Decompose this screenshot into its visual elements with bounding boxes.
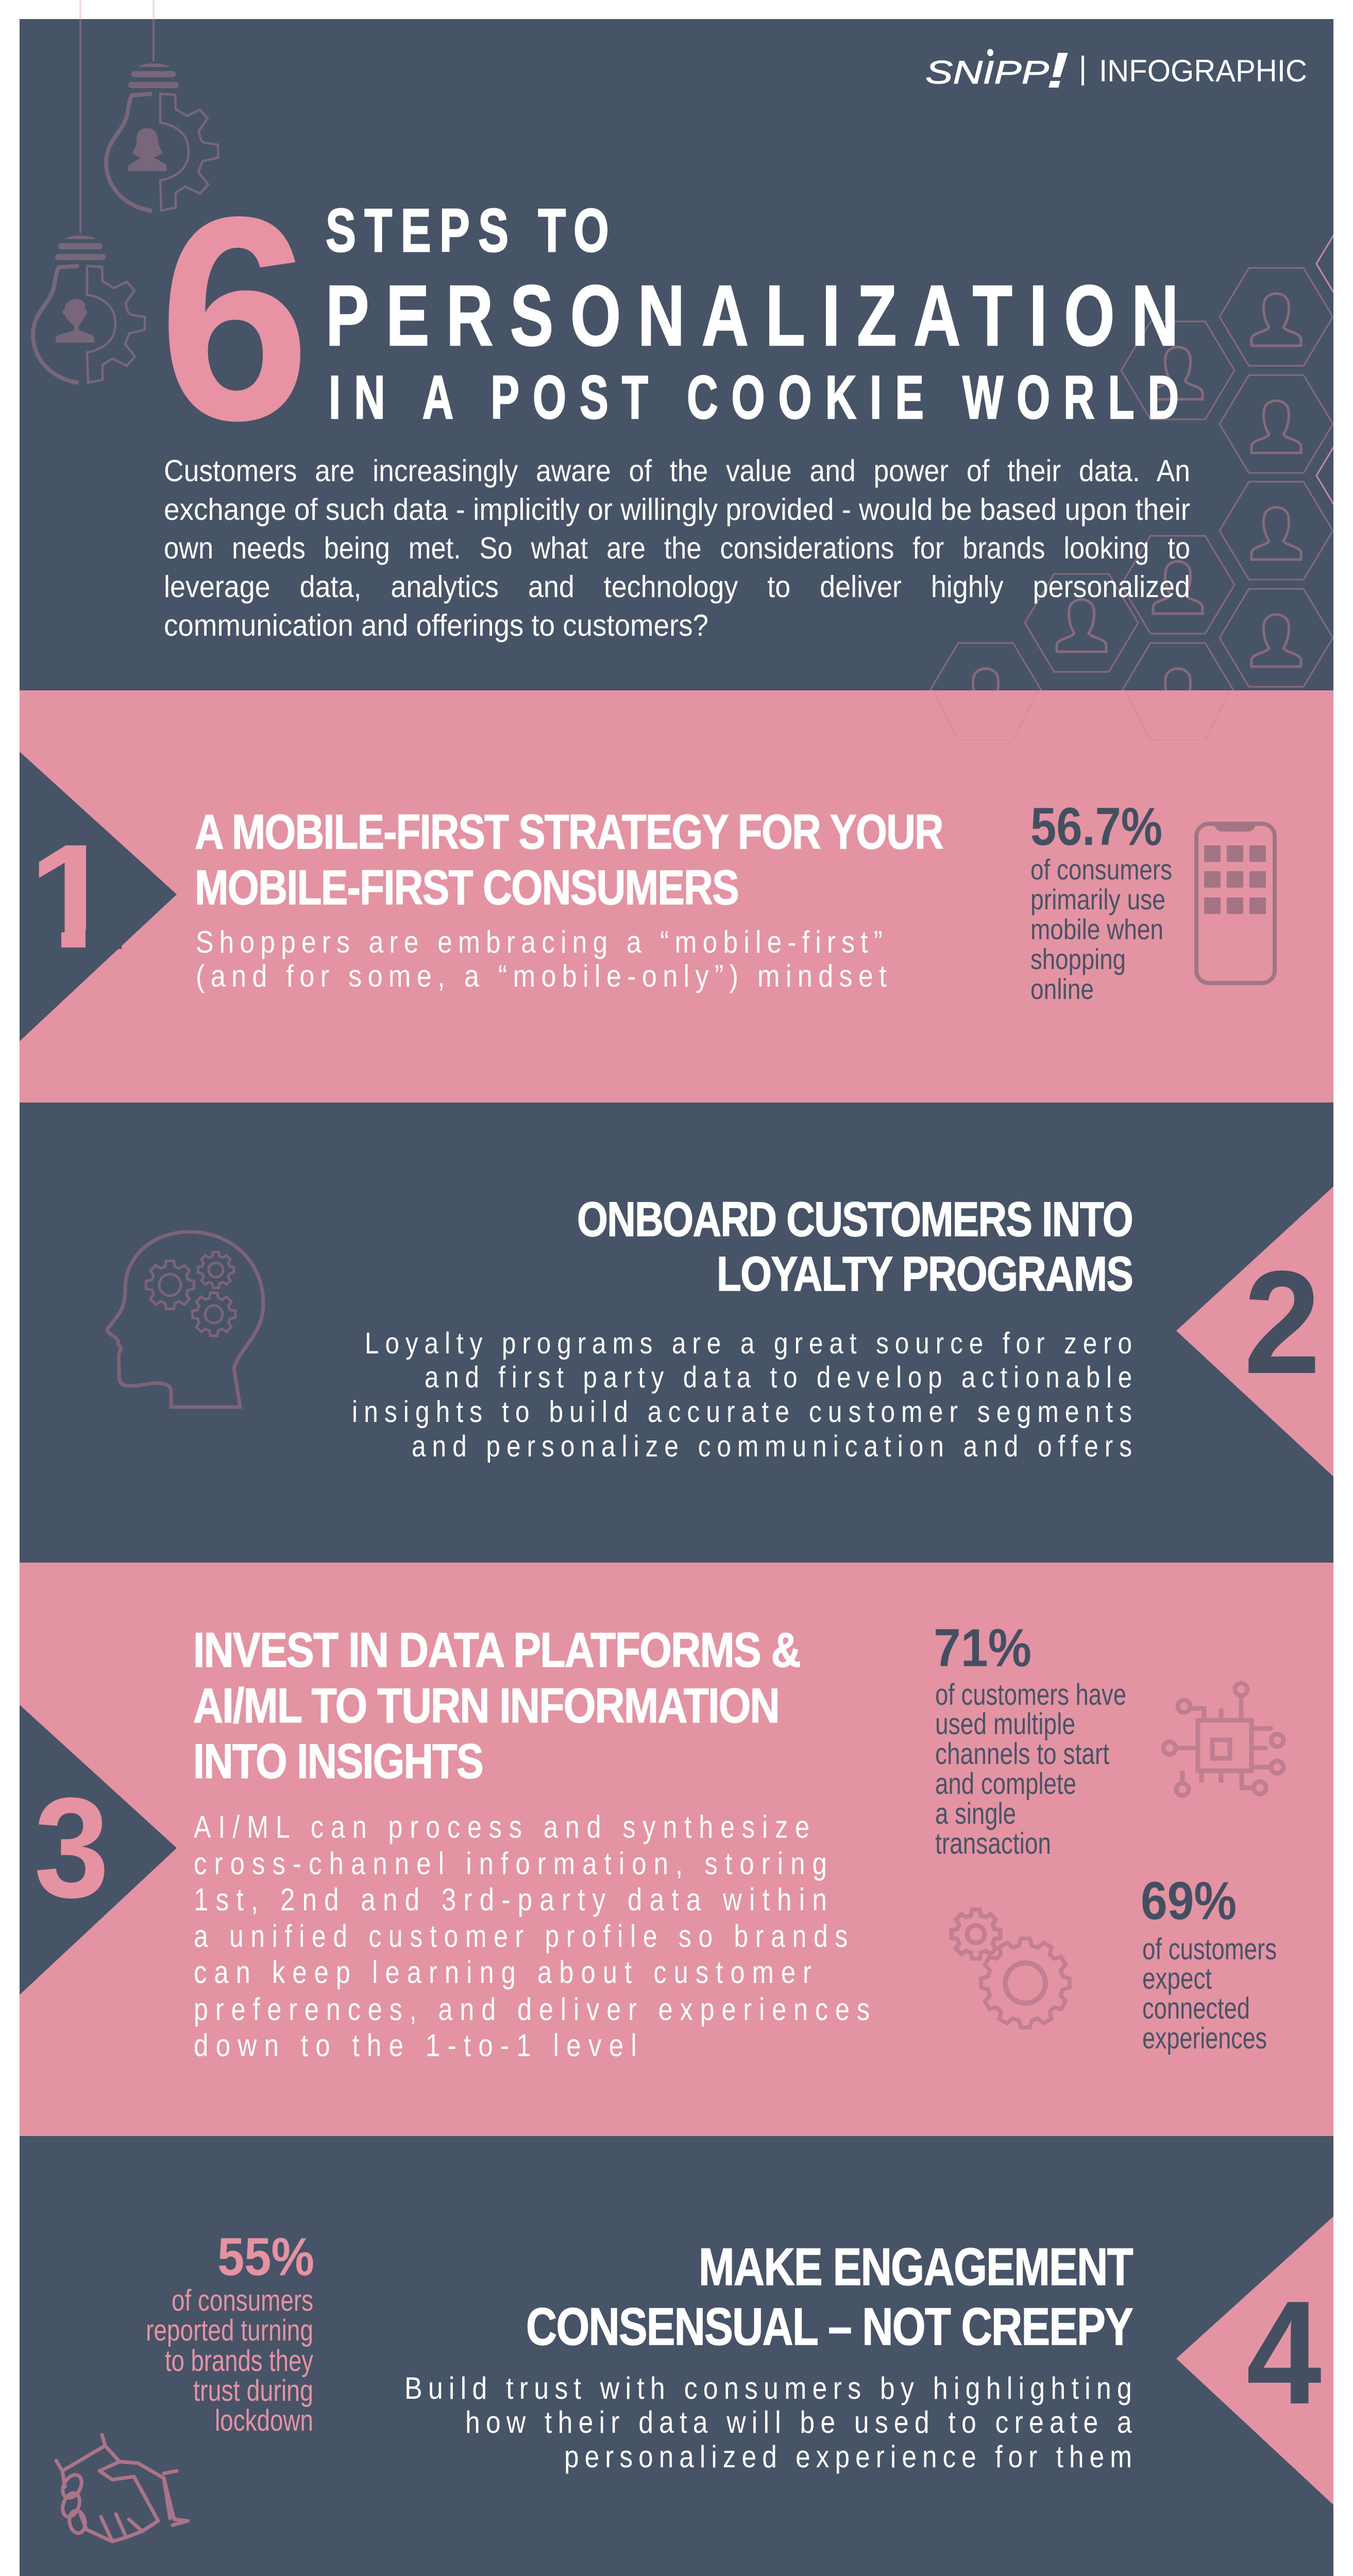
stat: 71%: used multiple (935, 1707, 1075, 1741)
intro text: Customers are increasingly aware of the value and power of their data. An (164, 454, 1190, 488)
body: down to the 1-to-1 level (194, 2028, 644, 2063)
stat: 55% (146, 2227, 314, 2437)
stat: 55%: 55% (217, 2227, 314, 2287)
stat: 69%: expect (1142, 1962, 1212, 1995)
stat: 56.7%: shopping (1030, 943, 1126, 975)
body (404, 2371, 1138, 2474)
logo: snipp infographic (925, 42, 1307, 98)
intro text: exchange of such data - implicitly or willingly provided - would be based upon their (164, 493, 1190, 527)
arrow (1176, 1187, 1333, 1477)
body: how their data will be used to create a (465, 2405, 1138, 2439)
heading (193, 1623, 800, 1789)
stat: 71%: 71% (934, 1618, 1031, 1678)
heading: ONBOARD CUSTOMERS INTO (577, 1192, 1132, 1247)
title (326, 196, 1195, 432)
stat: 56.7% (1030, 797, 1172, 1005)
stat: 56.7%: 56.7% (1030, 797, 1162, 857)
hexagon people pattern (929, 215, 1353, 741)
heading: MOBILE-FIRST CONSUMERS (195, 860, 738, 915)
body: can keep learning about customer (194, 1955, 819, 1990)
panel: header (20, 0, 1353, 741)
logo: snipp infographic: ! (1046, 42, 1069, 98)
body: and personalize communication and offers (412, 1430, 1138, 1463)
stat: 69%: of customers (1142, 1933, 1277, 1966)
body: insights to build accurate customer segments (352, 1395, 1138, 1429)
stat: 69%: connected (1142, 1992, 1250, 2025)
stat: 71%: a single (935, 1797, 1016, 1831)
hanging bulbs decoration (33, 0, 218, 383)
body: cross-channel information, storing (194, 1846, 834, 1881)
heading: AI/ML TO TURN INFORMATION (193, 1679, 779, 1733)
stat: 71%: transaction (935, 1827, 1051, 1860)
body: AI/ML can process and synthesize (194, 1809, 817, 1844)
intro text: leverage data, analytics and technology to deliver highly personalized (164, 570, 1190, 604)
stat: 55%: lockdown (215, 2404, 313, 2437)
heading (526, 2238, 1133, 2356)
number 4: 4 (1246, 2270, 1323, 2435)
arrow (1176, 2216, 1333, 2505)
stat: 55%: to brands they (165, 2344, 313, 2378)
stat: 56.7%: of consumers (1030, 853, 1172, 886)
number 1: 1 (28, 814, 115, 979)
body: Shoppers are embracing a “mobile-first” (196, 925, 888, 959)
panel: step 4 (20, 2136, 1333, 2576)
heading: LOYALTY PROGRAMS (717, 1247, 1132, 1301)
body (196, 925, 892, 993)
faint hexagons continuing (934, 692, 1229, 740)
arrow (20, 1705, 177, 1995)
title: STEPS TO (326, 196, 617, 265)
stat: 69%: 69% (1141, 1871, 1237, 1931)
heading: A MOBILE-FIRST STRATEGY FOR YOUR (195, 805, 943, 859)
body (352, 1327, 1138, 1463)
big number 6: 6 (159, 157, 310, 481)
body: and first party data to develop actionable (425, 1361, 1138, 1394)
stat: 56.7%: primarily use (1030, 883, 1165, 916)
icon: gears (951, 1909, 1070, 2027)
heading: INTO INSIGHTS (193, 1734, 483, 1789)
icon: chip (1163, 1683, 1283, 1795)
stat: 71%: channels to start (935, 1737, 1109, 1771)
body: a unified customer profile so brands (194, 1919, 855, 1954)
body (194, 1809, 877, 2063)
heading: CONSENSUAL – NOT CREEPY (526, 2297, 1133, 2356)
stat: 56.7%: mobile when (1030, 913, 1163, 945)
stat: 69%: experiences (1142, 2022, 1267, 2055)
body: 1st, 2nd and 3rd-party data within (194, 1882, 834, 1917)
heading (195, 805, 943, 915)
stat: 69% (1141, 1871, 1277, 2055)
heading: MAKE ENGAGEMENT (699, 2238, 1133, 2296)
logo: snipp infographic: SNIPP (925, 55, 1049, 91)
body: personalized experience for them (564, 2439, 1138, 2474)
intro text: own needs being met. So what are the considerations for brands looking to (164, 531, 1190, 565)
icon: head with gears (107, 1232, 263, 1407)
stat: 55%: reported turning (146, 2314, 313, 2347)
icon: phone (1196, 823, 1275, 983)
intro text: communication and offerings to customers? (164, 608, 708, 642)
panel: step 2 (20, 1103, 1333, 1563)
stat: 56.7%: online (1030, 973, 1094, 1005)
number 2: 2 (1244, 1241, 1321, 1404)
panel: step 3 (20, 1563, 1333, 2136)
stat: 71% (934, 1618, 1126, 1860)
stat: 71%: and complete (935, 1767, 1076, 1801)
stat: 55%: of consumers (172, 2284, 313, 2317)
heading: INVEST IN DATA PLATFORMS & (193, 1623, 800, 1677)
intro text (164, 454, 1190, 642)
body: preferences, and deliver experiences (194, 1992, 877, 2027)
body: Loyalty programs are a great source for zero (365, 1327, 1138, 1360)
stat: 55%: trust during (193, 2374, 313, 2408)
icon: handshake (56, 2435, 188, 2541)
panel: step 1 (20, 690, 1333, 1103)
heading (577, 1192, 1132, 1301)
number 3: 3 (34, 1768, 109, 1927)
logo: snipp infographic: INFOGRAPHIC (1099, 54, 1307, 88)
body: (and for some, a “mobile-only”) mindset (196, 959, 892, 993)
stat: 71%: of customers have (935, 1678, 1126, 1711)
body: Build trust with consumers by highlighting (404, 2371, 1138, 2405)
arrow (20, 752, 177, 1041)
